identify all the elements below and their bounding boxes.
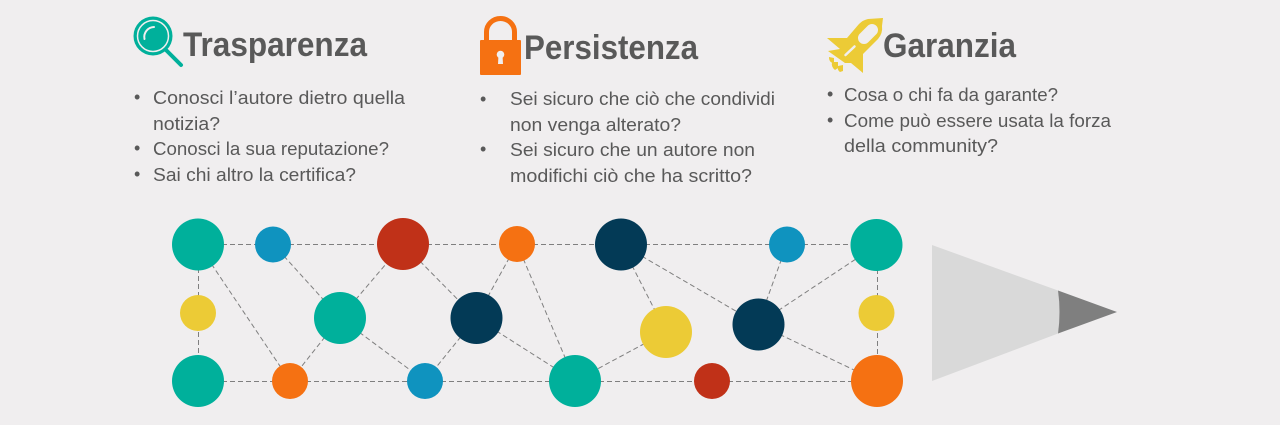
network connections (198, 244, 878, 382)
text block: Trasparenza questions: Conosci la sua reputazione? (153, 138, 389, 159)
text block: Trasparenza questions: • (134, 164, 140, 184)
text block: Trasparenza questions: • (134, 87, 140, 107)
heading: Trasparenza: Trasparenza (183, 26, 368, 64)
text block: Persistenza questions: modifichi ciò che ha scritto? (510, 165, 752, 186)
icon: rocket (827, 18, 883, 73)
text block: Garanzia questions (827, 84, 1112, 156)
text block: Garanzia questions: Cosa o chi fa da garante? (844, 84, 1058, 105)
text block: Garanzia questions: • (827, 110, 833, 130)
text block: Trasparenza questions: Conosci l’autore dietro quella (153, 87, 406, 108)
heading: Persistenza: Persistenza (524, 29, 699, 67)
icon: padlock (480, 18, 521, 75)
text block: Persistenza questions: Sei sicuro che ciò che condividi (510, 88, 775, 109)
text block: Trasparenza questions: notizia? (153, 113, 220, 134)
text block: Persistenza questions (480, 88, 775, 186)
panel: Persistenza (480, 18, 775, 186)
text block: Garanzia questions: Come può essere usata la forza (844, 110, 1112, 131)
text block: Persistenza questions: Sei sicuro che un autore non (510, 139, 755, 160)
text block: Trasparenza questions: Sai chi altro la certifica? (153, 164, 356, 185)
panel: Garanzia (827, 18, 1112, 156)
text block: Garanzia questions: • (827, 84, 833, 104)
text block: Trasparenza questions: • (134, 138, 140, 158)
text block: Garanzia questions: della community? (844, 135, 998, 156)
text block: Persistenza questions: non venga alterato? (510, 114, 681, 135)
icon: magnifying glass (134, 16, 181, 65)
chart: network diagram (172, 218, 903, 407)
network nodes (172, 218, 903, 407)
heading: Garanzia: Garanzia (883, 27, 1017, 65)
icon: pencil tip arrow (932, 245, 1117, 381)
panel: Trasparenza (134, 16, 406, 185)
text block: Persistenza questions: • (480, 139, 486, 159)
text block: Trasparenza questions (134, 87, 406, 185)
text block: Persistenza questions: • (480, 89, 486, 109)
